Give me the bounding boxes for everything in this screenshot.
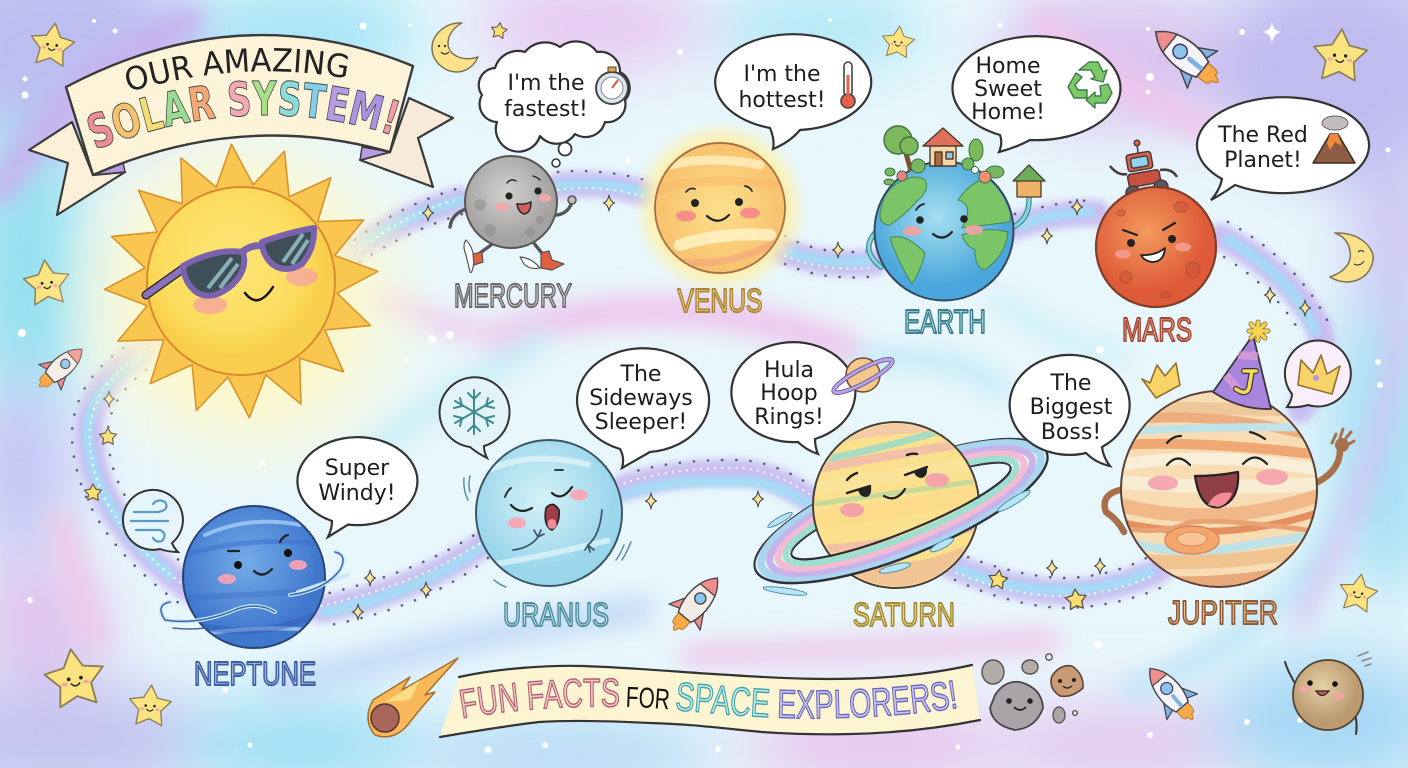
speech bubble: Saturn: Rings! <box>754 405 824 430</box>
ribbon main <box>66 35 413 175</box>
banner text: FUN FACTS FOR SPACE EXPLORERS! <box>459 678 957 720</box>
speech bubble: Earth: Home! <box>971 100 1045 125</box>
speech bubble: Jupiter: The <box>1050 371 1091 396</box>
planet: Saturn <box>753 421 1049 596</box>
sun smile <box>245 287 273 300</box>
speech bubble: Jupiter: Boss! <box>1041 420 1101 445</box>
planet: Mars <box>1096 140 1216 307</box>
asteroids <box>982 654 1083 730</box>
mercury legs and arms <box>450 202 572 257</box>
jupiter arms <box>1105 450 1340 532</box>
planet: Venus <box>632 120 808 296</box>
label: Earth: EARTH <box>904 303 986 340</box>
rocket top right <box>1141 13 1233 101</box>
speech bubble: snowflake <box>440 377 510 458</box>
speech bubble: Mercury: fastest! <box>504 97 588 122</box>
speech bubble: Venus: hottest! <box>738 88 826 113</box>
planet: Earth <box>869 126 1045 300</box>
banner ribbon <box>440 665 980 737</box>
dwarf planet: Pluto <box>1285 652 1371 734</box>
speech bubble: Uranus: Sleeper! <box>595 410 687 435</box>
planet: Mercury <box>450 156 576 273</box>
speech bubble: Saturn: Hula <box>764 358 814 383</box>
icon: volcano <box>1313 116 1355 163</box>
speech bubble: Jupiter <box>1010 355 1130 466</box>
speech bubble: Neptune: Windy! <box>318 481 396 506</box>
ribbon left tail <box>29 122 125 215</box>
jupiter face <box>1148 432 1288 507</box>
earth arms <box>1011 197 1029 228</box>
ring splashes <box>763 488 1032 597</box>
speech bubble: Saturn <box>731 342 895 454</box>
crescent moon right <box>1330 233 1373 282</box>
speech bubble: Saturn: Hoop <box>760 381 818 406</box>
party hat <box>1213 322 1271 409</box>
saturn front ring <box>755 452 1063 612</box>
sun <box>45 100 445 500</box>
speech bubble: Mercury <box>479 41 630 167</box>
neptune wind lines <box>161 552 347 629</box>
comet <box>368 658 458 737</box>
starry glitter trail linking the planets <box>72 171 1332 626</box>
speech bubble: wind <box>123 490 183 552</box>
speech bubble: Mars: The Red <box>1217 123 1308 148</box>
speech bubble: crown <box>1285 341 1351 407</box>
speech bubble: Mercury: I'm the <box>507 71 585 96</box>
icon: crown <box>1298 355 1340 394</box>
speech bubble: Neptune: Super <box>325 456 390 481</box>
rocket left <box>28 337 93 399</box>
bottom banner <box>438 664 982 738</box>
speech bubble: Mars: Planet! <box>1224 148 1302 173</box>
speech bubble: Uranus: The <box>620 362 661 387</box>
icon: snowflake <box>454 390 494 434</box>
label: Saturn: SATURN <box>853 596 955 633</box>
crescent moon top <box>432 23 478 72</box>
ribbon right tail <box>360 98 453 187</box>
speech bubble: Neptune <box>297 437 417 537</box>
icon: stopwatch <box>596 67 628 104</box>
speech bubble: Venus <box>715 34 871 149</box>
rocket bottom middle <box>658 565 733 643</box>
speech bubble: Earth: Home <box>976 54 1040 79</box>
label: Uranus: URANUS <box>503 596 609 633</box>
earth tree <box>884 126 918 171</box>
speech bubble: Jupiter: Biggest <box>1030 395 1113 420</box>
winged shoes <box>464 240 564 273</box>
planet: Neptune <box>161 506 347 648</box>
uranus arms <box>513 510 602 552</box>
saturn back ring <box>739 410 1047 570</box>
icon: thermometer <box>841 62 855 108</box>
icon: wind swirls <box>131 500 168 542</box>
speech bubble: Earth: Sweet <box>974 77 1042 102</box>
speech bubble: Uranus <box>577 348 709 468</box>
speech bubble: Venus: I'm the <box>743 62 821 87</box>
planet: Jupiter <box>1105 322 1354 587</box>
speech bubble: Mars <box>1197 97 1369 200</box>
icon: recycle arrows <box>1068 62 1112 108</box>
icon: ringed planet <box>831 354 895 398</box>
label: Jupiter: JUPITER <box>1168 594 1278 631</box>
label: Neptune: NEPTUNE <box>194 655 316 692</box>
saturn face <box>840 454 949 517</box>
label: Mars: MARS <box>1122 311 1192 348</box>
speech bubble: Uranus: Sideways <box>589 386 693 411</box>
icon: gold crown beside Jupiter <box>1142 363 1180 398</box>
tiny house <box>1013 165 1045 197</box>
sun cheeks <box>193 268 318 314</box>
great red spot <box>1165 526 1219 554</box>
planet: Uranus <box>464 440 631 587</box>
earth house <box>923 128 963 166</box>
robot rover on Mars <box>1110 140 1177 200</box>
speech bubble: Earth <box>952 36 1120 152</box>
title line two: SOLAR SYSTEM! <box>87 80 400 148</box>
label: Venus: VENUS <box>678 282 762 319</box>
rocket bottom right <box>1135 656 1208 732</box>
sunglasses <box>146 228 314 296</box>
earth flowers and bushes <box>884 139 1004 185</box>
title line one: OUR AMAZING <box>126 48 348 90</box>
title banner <box>28 34 454 216</box>
label: Mercury: MERCURY <box>454 277 572 314</box>
